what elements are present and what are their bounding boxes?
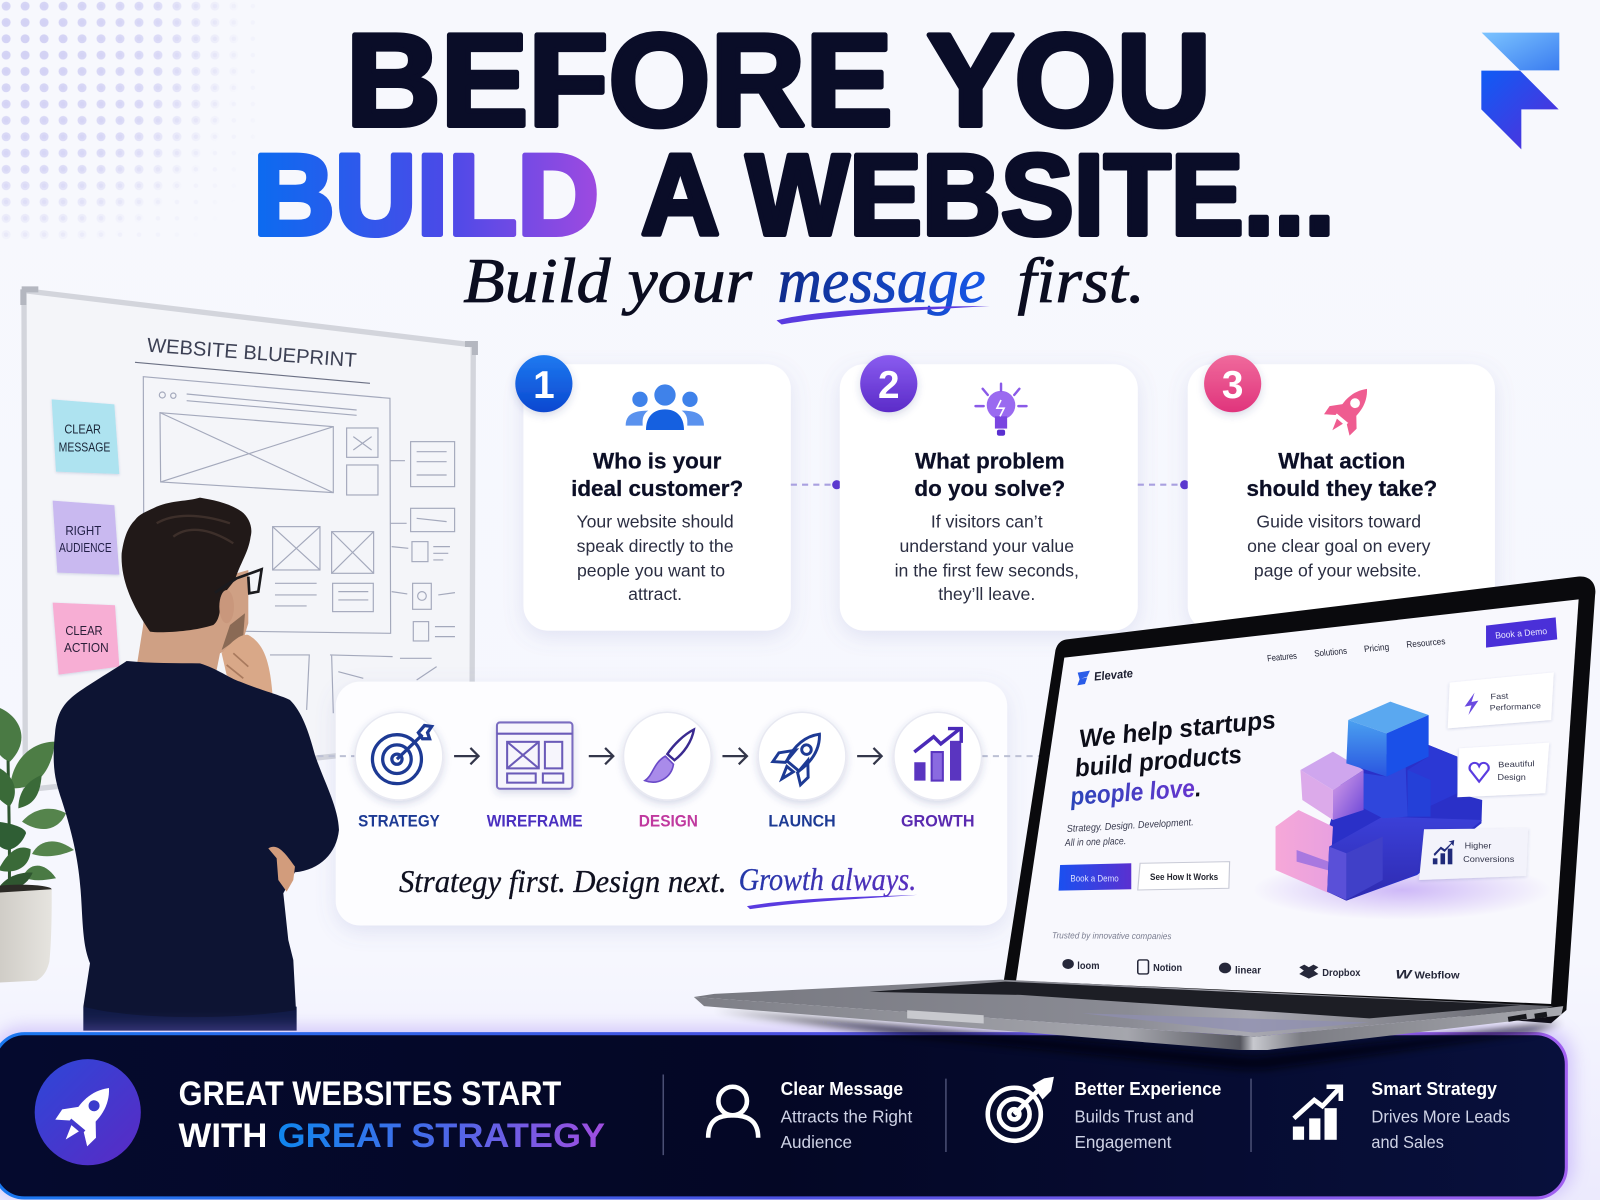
card [1188, 364, 1495, 631]
step: design: DESIGN [639, 812, 698, 831]
wireframe sketch [135, 362, 455, 713]
hero buttons: Book a Demo [1070, 874, 1119, 884]
benefit: clear message [708, 1078, 912, 1152]
heading: Who is your [593, 448, 722, 473]
sticky note: right audience: AUDIENCE [59, 540, 112, 555]
body text: they’ll leave. [938, 584, 1035, 604]
leaves [0, 707, 74, 891]
nav: Features [1267, 651, 1298, 664]
body text: understand your value [899, 536, 1074, 556]
step: growth: GROWTH [901, 812, 974, 831]
heading: What action [1278, 448, 1405, 473]
sticky note: clear action: CLEAR [65, 623, 103, 638]
sticky note: clear message: CLEAR [64, 421, 101, 436]
feature cards [1419, 672, 1554, 880]
logo top [1482, 33, 1559, 70]
banner headline [179, 1075, 605, 1155]
nav: Pricing [1363, 642, 1390, 655]
subtitle end: first. [1017, 246, 1145, 316]
rocket badge [35, 1059, 141, 1165]
trusted logos: loom [1077, 961, 1100, 972]
badge 2 [860, 355, 917, 412]
sticky note: right audience: RIGHT [65, 523, 101, 538]
slogan [399, 862, 917, 909]
benefit: smart strategy: Smart Strategy [1371, 1078, 1498, 1099]
body text [895, 512, 1079, 604]
body text: speak directly to the [577, 536, 734, 556]
trusted logos: Notion [1153, 963, 1182, 974]
hero headline: We help startups [1077, 705, 1277, 753]
pot [0, 885, 52, 983]
notch [907, 1010, 984, 1023]
trusted logos [1052, 931, 1460, 981]
icon: rocket [1319, 378, 1381, 442]
benefit: smart strategy: Drives More Leads [1371, 1106, 1511, 1126]
step: design [623, 712, 711, 831]
banner background [0, 1034, 1566, 1198]
panel: process [306, 682, 1051, 926]
bezel [1004, 576, 1595, 1023]
card [336, 682, 1007, 926]
step: growth [894, 712, 982, 831]
body text: If visitors can’t [931, 512, 1043, 532]
subtitle lead: Build your [463, 246, 752, 316]
laptop screen [1004, 576, 1595, 1023]
banner headline: GREAT WEBSITES START [179, 1075, 561, 1113]
feature cards: Design [1498, 773, 1526, 782]
body text: in the first few seconds, [895, 561, 1079, 581]
feature cards: Performance [1489, 701, 1541, 713]
dashed links [306, 755, 1051, 757]
arrow [857, 748, 882, 764]
benefit: smart strategy: and Sales [1371, 1132, 1444, 1152]
subtitle underline [777, 306, 990, 324]
benefit: better experience [988, 1078, 1221, 1152]
slogan: Strategy first. Design next. [399, 864, 727, 899]
slogan: Growth always. [739, 862, 916, 897]
badge 2: 2 [878, 364, 900, 407]
body text [1247, 512, 1431, 581]
logo [1481, 33, 1559, 149]
banner headline: GREAT STRATEGY [278, 1117, 605, 1155]
hero headline: people love. [1068, 773, 1202, 811]
heading [571, 448, 743, 501]
step: launch: LAUNCH [768, 812, 836, 831]
heading [1246, 448, 1437, 501]
board corner brackets [22, 289, 475, 355]
body text: attract. [628, 584, 682, 604]
card [840, 364, 1138, 631]
connector 2-3 [1138, 480, 1189, 489]
benefit: clear message: Audience [781, 1132, 852, 1152]
hero buttons: See How It Works [1150, 873, 1218, 883]
connector 1-2 [791, 480, 841, 489]
torso [54, 661, 339, 1031]
panel: step 3 [1188, 355, 1495, 631]
hero buttons [1059, 862, 1230, 891]
step: wireframe [487, 722, 583, 831]
heading: should they take? [1246, 476, 1437, 501]
sticky note: clear message: MESSAGE [59, 440, 110, 455]
trusted logos: Dropbox [1322, 968, 1361, 979]
hero sub: All in one place. [1064, 836, 1126, 849]
subtitle [463, 246, 1145, 324]
benefit: clear message: Clear Message [781, 1078, 903, 1099]
ports [1508, 1014, 1547, 1019]
trusted logos: Webflow [1414, 970, 1460, 981]
nav: Solutions [1314, 646, 1348, 659]
panel: step 1 [515, 355, 791, 631]
whiteboard [22, 289, 475, 790]
body text: Guide visitors toward [1256, 512, 1421, 532]
benefit: better experience: Engagement [1074, 1132, 1172, 1152]
logo bottom [1481, 71, 1559, 149]
head [122, 498, 273, 697]
body text: people you want to [577, 561, 725, 581]
front lip [694, 997, 1563, 1050]
badge 1: 1 [533, 364, 555, 407]
step: wireframe: WIREFRAME [487, 812, 583, 831]
step: strategy: STRATEGY [358, 812, 440, 831]
arrow [454, 748, 479, 764]
board surface [24, 291, 473, 790]
benefit: clear message: Attracts the Right [781, 1106, 912, 1126]
body text [576, 512, 734, 604]
badge 3 [1204, 355, 1261, 412]
arrow [589, 748, 613, 764]
banner headline: WITH [179, 1117, 267, 1155]
sticky note: clear action [53, 603, 119, 675]
nav [1077, 617, 1557, 685]
heading: do you solve? [914, 476, 1065, 501]
benefit: smart strategy [1293, 1078, 1511, 1152]
title [253, 7, 1335, 260]
feature cards: Beautiful [1498, 759, 1535, 769]
sticky note: clear action: ACTION [64, 640, 109, 655]
3d blocks [1253, 702, 1551, 920]
feature cards: Higher [1465, 841, 1492, 850]
banner glow [0, 1027, 1573, 1198]
arrow [722, 748, 747, 764]
badge 3: 3 [1222, 364, 1243, 407]
hero sub: Strategy. Design. Development. [1066, 817, 1194, 835]
dividers [663, 1074, 1251, 1155]
title line two: A WEBSITE... [641, 132, 1335, 260]
laptop shadow [714, 1010, 1561, 1069]
heading: ideal customer? [571, 476, 743, 501]
deck surface [694, 980, 1553, 1037]
bottom banner [0, 1027, 1573, 1198]
nav: Book a Demo [1495, 627, 1548, 641]
hero headline: build products [1073, 740, 1243, 782]
body text: one clear goal on every [1247, 536, 1431, 556]
title word: build: BUILD [253, 132, 599, 260]
sticky note: clear message [52, 399, 119, 474]
icon: people [626, 384, 704, 430]
person [54, 498, 339, 1031]
nav: Resources [1406, 637, 1446, 650]
panel: step 2 [840, 355, 1138, 631]
trusted logos: linear [1235, 965, 1262, 976]
title line one: BEFORE YOU [346, 7, 1211, 154]
icon: bulb [976, 384, 1027, 436]
benefit: better experience: Builds Trust and [1074, 1106, 1194, 1126]
step: launch [758, 712, 846, 831]
hero sub [1064, 817, 1194, 849]
nav: Elevate [1093, 666, 1134, 683]
plant [0, 707, 74, 983]
trusted logos: Trusted by innovative companies [1052, 931, 1172, 942]
body text: page of your website. [1254, 561, 1422, 581]
body text: Your website should [576, 512, 734, 532]
heading [914, 448, 1065, 501]
board title: WEBSITE BLUEPRINT [146, 335, 357, 372]
hero headline [1068, 705, 1277, 811]
card [523, 364, 791, 631]
laptop base [694, 980, 1563, 1069]
feature cards: Conversions [1463, 855, 1514, 864]
display [1016, 599, 1579, 1004]
trackpad [1082, 1013, 1369, 1033]
subtitle highlight: message [778, 246, 986, 316]
step: strategy [355, 712, 443, 831]
trusted logos: W [1395, 967, 1414, 981]
keyboard [869, 982, 1520, 1018]
feature cards: Fast [1490, 691, 1509, 701]
benefit: better experience: Better Experience [1074, 1078, 1221, 1099]
heading: What problem [915, 448, 1065, 473]
badge 1 [515, 355, 572, 412]
sticky note: right audience [53, 501, 119, 575]
